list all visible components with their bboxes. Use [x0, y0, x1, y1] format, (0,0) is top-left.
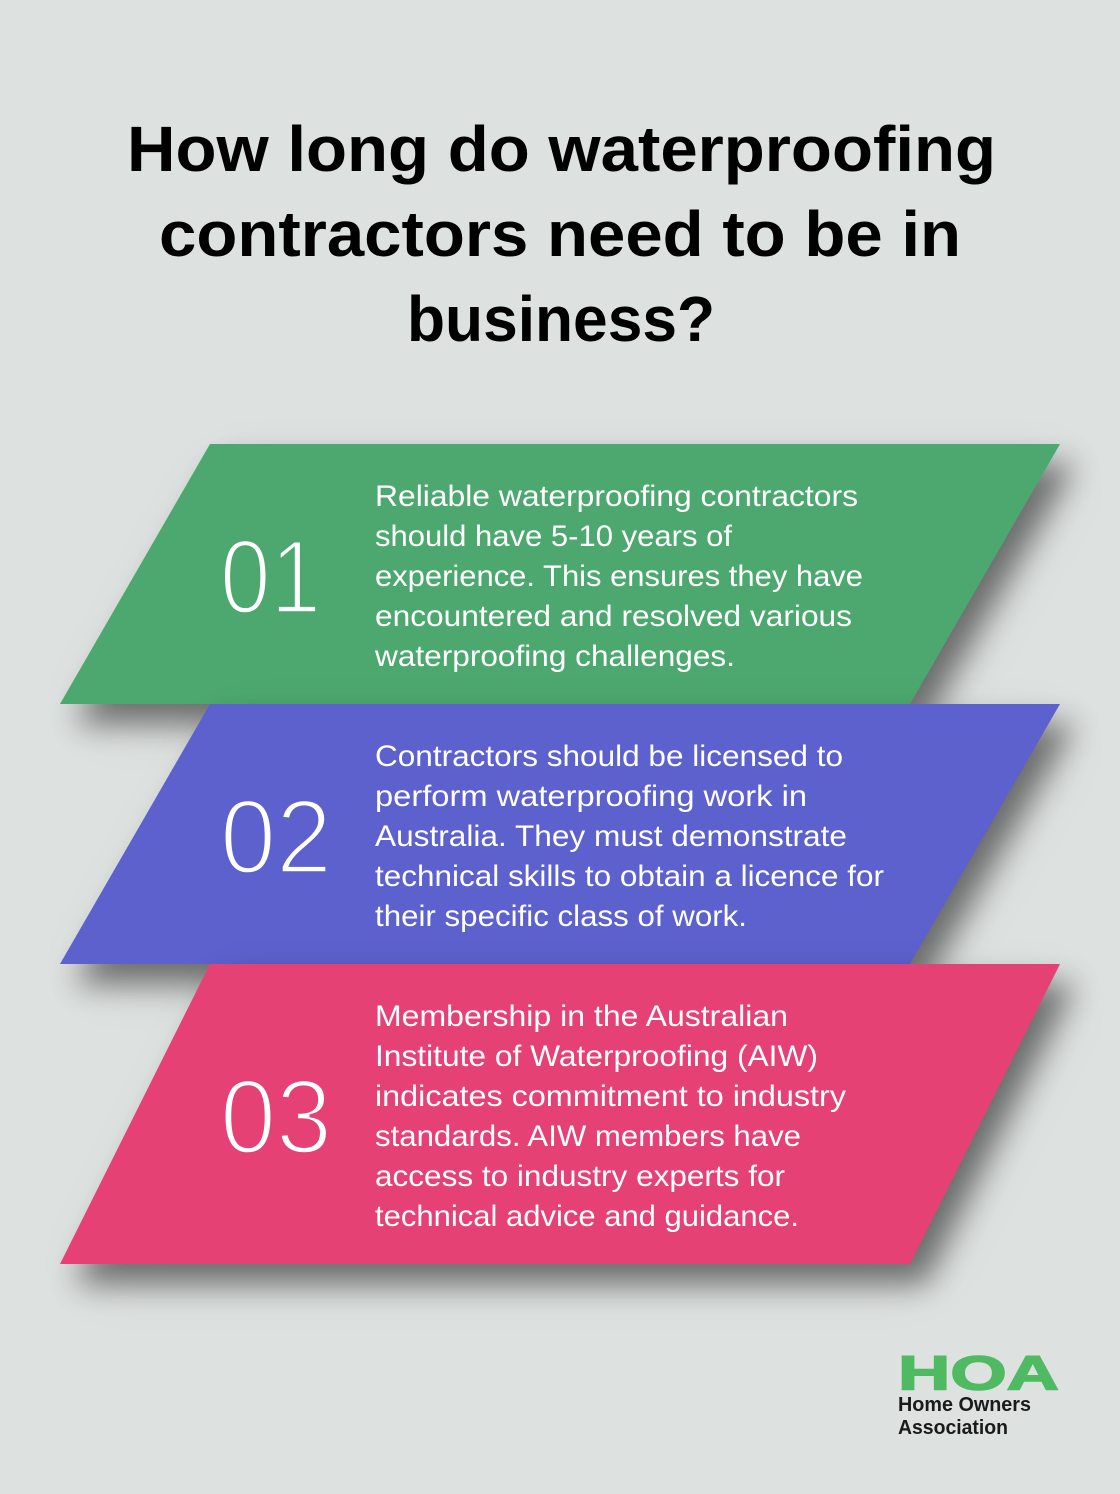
step 01 text: Reliable waterproofing contractors	[375, 480, 858, 513]
step 01 number: 01	[220, 519, 321, 636]
step 02 text: their specific class of work.	[375, 900, 747, 933]
step 02 text: Australia. They must demonstrate	[375, 820, 847, 853]
step 01 text	[374, 480, 863, 673]
title	[127, 113, 996, 355]
step 03 text	[375, 1000, 846, 1233]
title: contractors need to be in	[159, 198, 961, 270]
step 03 text: standards. AIW members have	[375, 1120, 801, 1153]
step 02 number: 02	[220, 779, 332, 896]
logo: HOA Home Owners Association: Association	[898, 1417, 1008, 1439]
logo: HOA Home Owners Association: HOA	[898, 1348, 1059, 1400]
logo: HOA Home Owners Association	[898, 1348, 1059, 1439]
step 01 text: should have 5-10 years of	[375, 520, 733, 553]
panel: step 01	[60, 444, 1075, 724]
step 03 number: 03	[220, 1059, 332, 1176]
title: How long do waterproofing	[127, 113, 996, 185]
step 03 text: Institute of Waterproofing (AIW)	[375, 1040, 818, 1073]
step 02 text	[375, 740, 884, 933]
step 02 text: perform waterproofing work in	[375, 780, 807, 813]
logo: HOA Home Owners Association: Home Owners	[898, 1394, 1031, 1416]
step 03 text: access to industry experts for	[375, 1160, 785, 1193]
panel: step 02	[60, 704, 1075, 984]
step 02 text: technical skills to obtain a licence for	[375, 860, 884, 893]
panel: step 03	[60, 964, 1075, 1284]
title: business?	[407, 283, 715, 355]
step 03 text: technical advice and guidance.	[375, 1200, 799, 1233]
step 01 text: waterproofing challenges.	[374, 640, 735, 673]
step 03 text: indicates commitment to industry	[375, 1080, 846, 1113]
step 03 text: Membership in the Australian	[375, 1000, 788, 1033]
step 01 text: experience. This ensures they have	[375, 560, 863, 593]
step 02 text: Contractors should be licensed to	[375, 740, 843, 773]
step 01 text: encountered and resolved various	[375, 600, 852, 633]
